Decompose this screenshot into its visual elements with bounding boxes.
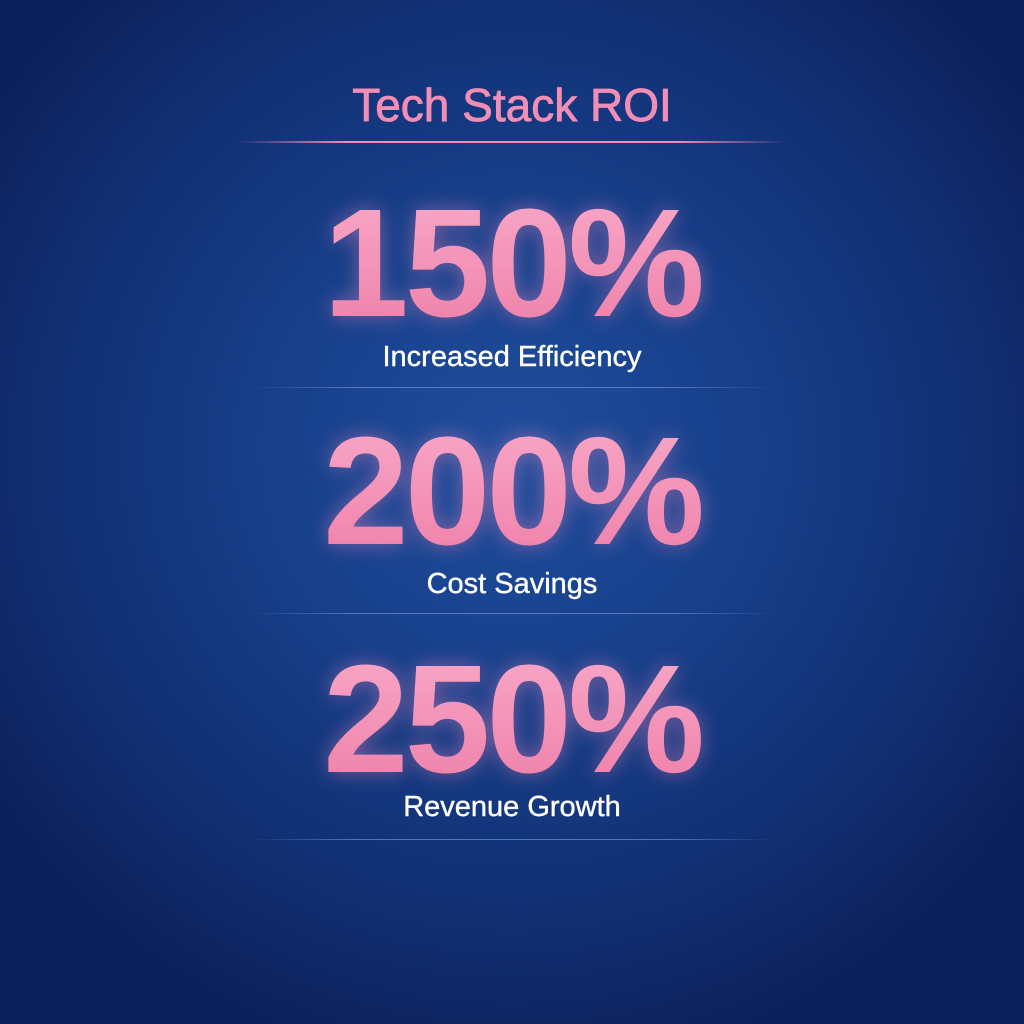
title underline [238, 141, 786, 143]
stat: 200%: 200% [323, 405, 701, 577]
stat: 250% [0, 642, 1024, 796]
label: Revenue Growth: Revenue Growth [403, 791, 621, 823]
title: Tech Stack ROI [352, 79, 672, 131]
label: Increased Efficiency: Increased Efficiency [382, 341, 642, 373]
stat: 200% [0, 414, 1024, 568]
stat: 250%: 250% [323, 633, 701, 805]
stat: 150% [0, 186, 1024, 340]
stat: 150%: 150% [323, 177, 701, 349]
label: Cost Savings: Cost Savings [427, 568, 597, 600]
